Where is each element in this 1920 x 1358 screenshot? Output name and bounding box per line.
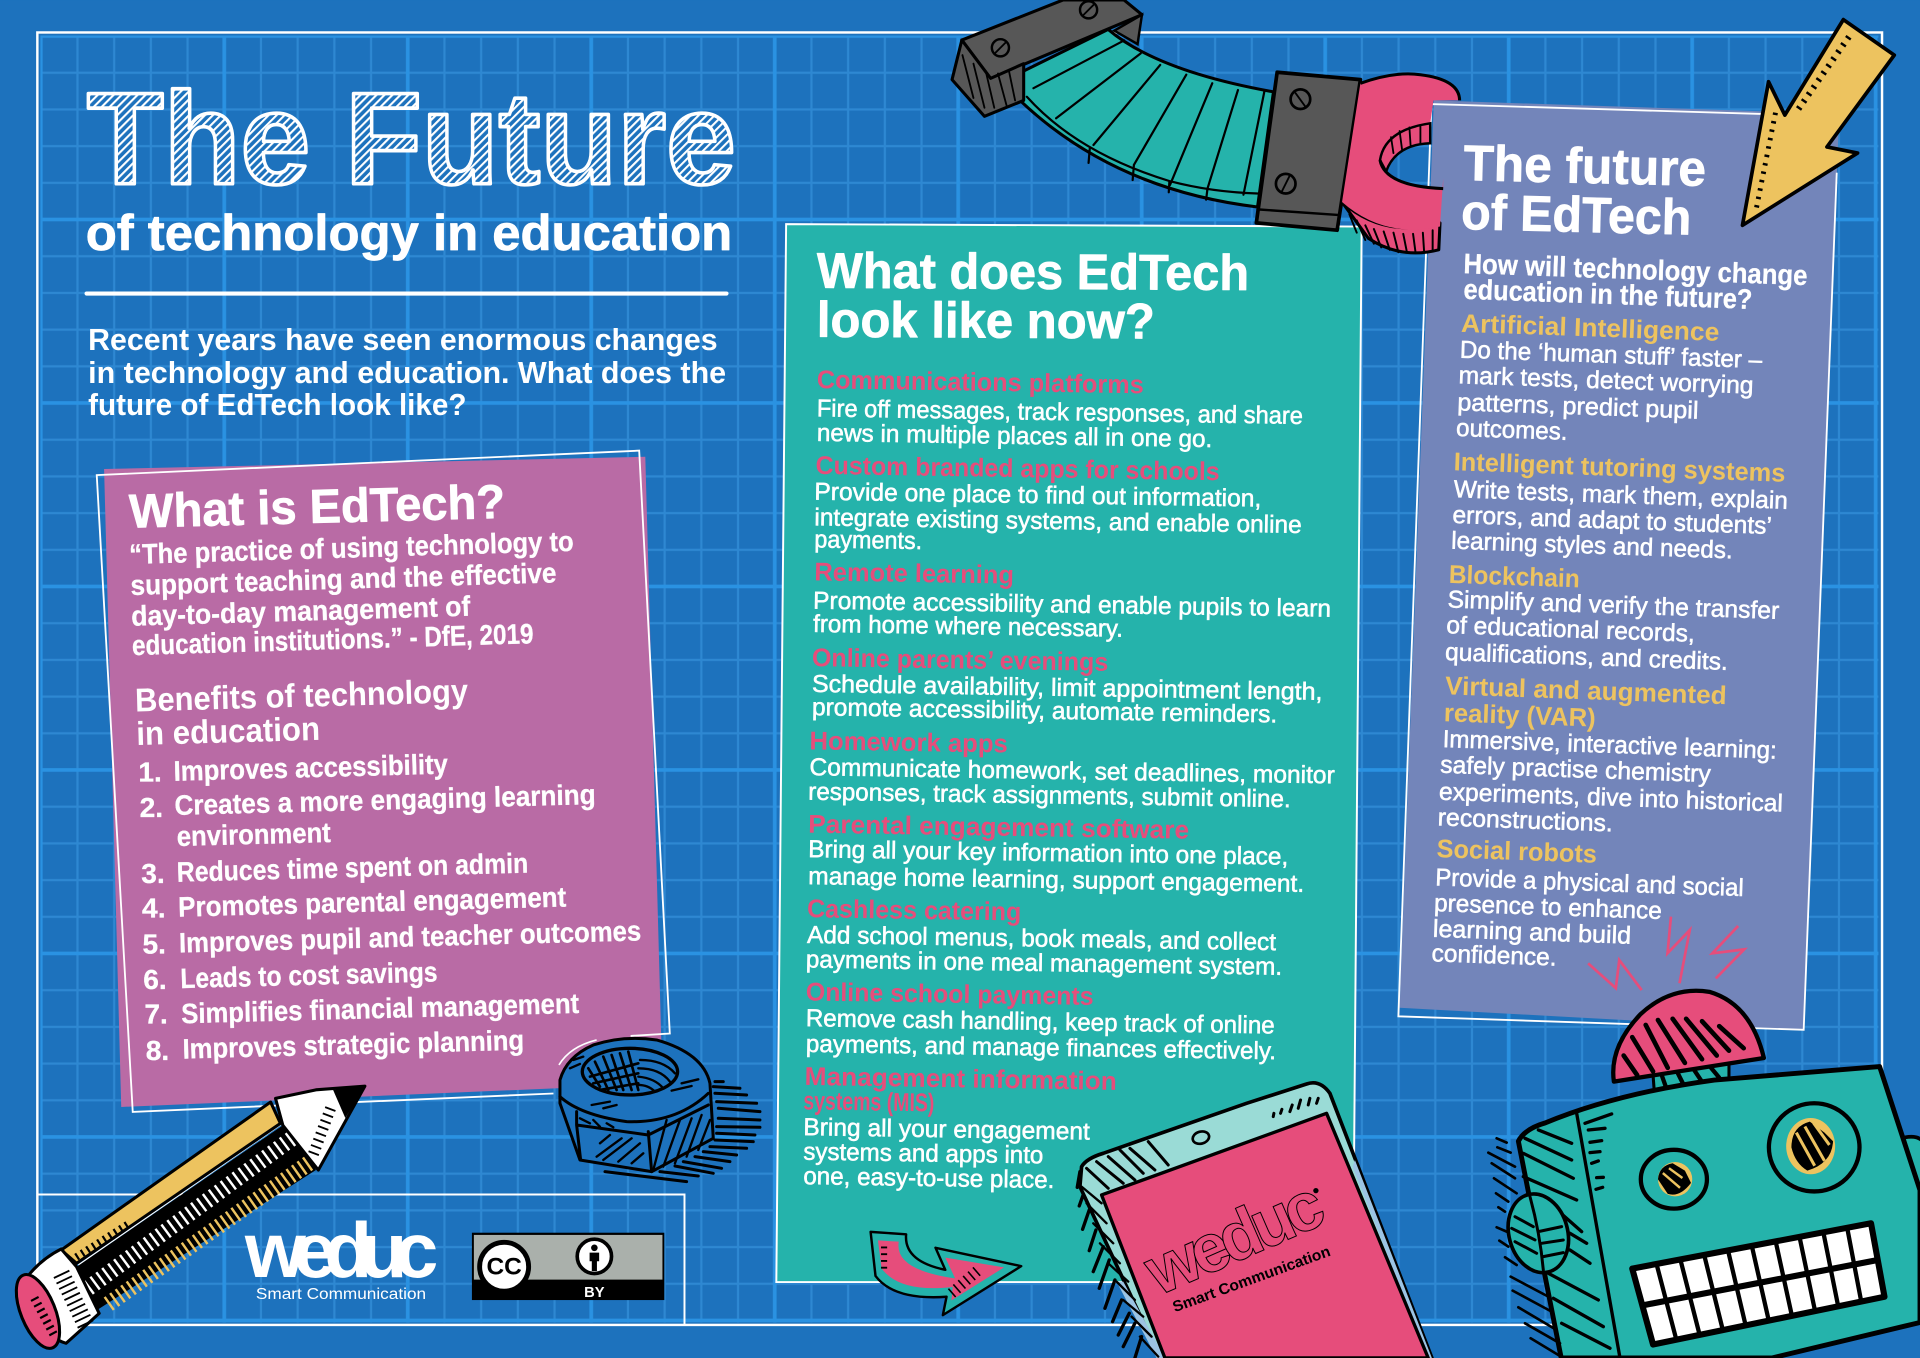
benefits list: 2. <box>140 792 163 823</box>
panel: What does EdTech look like now? <box>776 224 1362 1282</box>
benefits list: Creates a more engaging learning <box>174 779 596 821</box>
weduc wordmark: weduc <box>244 1206 438 1294</box>
benefits list: 5. <box>143 928 166 959</box>
entries: current EdTech: Online parents’ evenings <box>812 644 1108 677</box>
entries: future EdTech: reality (VAR) <box>1443 699 1596 733</box>
robot right ear <box>1899 1137 1920 1206</box>
benefits list: Improves accessibility <box>173 749 449 787</box>
robot side stripes and ear <box>1488 1113 1620 1358</box>
heading: What does EdTech <box>817 243 1249 301</box>
entries: future EdTech: Simplify and verify the transfer <box>1447 586 1780 625</box>
DfE quote: education institutions.” - DfE, 2019 <box>132 618 534 661</box>
entries: future EdTech: Intelligent tutoring systems <box>1453 448 1786 488</box>
benefits list: 8. <box>146 1035 169 1066</box>
entries: current EdTech: systems (MIS) <box>803 1087 935 1117</box>
DfE quote <box>129 526 574 661</box>
subtitle: of technology in education <box>86 205 732 261</box>
entries: current EdTech: Management information <box>804 1063 1117 1096</box>
benefits heading: Benefits of technology <box>135 673 469 719</box>
DfE quote: support teaching and the effective <box>130 557 557 601</box>
phone logo tagline: Smart Communication <box>1170 1243 1333 1316</box>
benefits heading: in education <box>136 711 320 753</box>
intro text: Recent years have seen enormous changes <box>88 323 718 357</box>
entries: current EdTech: Online school payments <box>806 978 1094 1011</box>
entries: current EdTech: payments in one meal management system. <box>806 946 1282 981</box>
heading <box>817 243 1249 350</box>
robot head <box>1518 1067 1920 1358</box>
entries: current EdTech: Cashless catering <box>807 895 1022 927</box>
phone logo wordmark: weduc <box>1133 1166 1335 1310</box>
entries: future EdTech: Blockchain <box>1448 561 1580 593</box>
question: education in the future? <box>1463 274 1753 315</box>
entries: future EdTech: Artificial Intelligence <box>1461 310 1720 347</box>
intro text: future of EdTech look like? <box>88 388 467 422</box>
title <box>84 65 736 422</box>
heading: The future <box>1463 135 1707 197</box>
benefits list: Improves pupil and teacher outcomes <box>179 915 642 959</box>
icon: flexible clamp <box>952 0 1360 230</box>
entries: future EdTech: of educational records, <box>1446 612 1695 648</box>
entries: future EdTech: safely practise chemistry <box>1440 752 1712 788</box>
robot right eye <box>1769 1103 1860 1191</box>
entries: current EdTech: Schedule availability, limit appointment length, <box>812 671 1323 706</box>
entries: future EdTech: confidence. <box>1431 940 1557 972</box>
badge: creative commons: BY <box>584 1285 605 1301</box>
DfE quote: “The practice of using technology to <box>129 526 574 570</box>
DfE quote: day-to-day management of <box>131 591 471 632</box>
icon: yellow arrow <box>1742 20 1894 225</box>
icon: magnet <box>1342 74 1460 253</box>
panel: What is EdTech? <box>97 451 670 1112</box>
benefits list <box>138 749 642 1066</box>
entries: future EdTech: Write tests, mark them, explain <box>1453 476 1788 515</box>
entries: current EdTech: payments. <box>814 526 922 555</box>
entries: future EdTech: presence to enhance <box>1434 890 1662 925</box>
heading <box>1461 135 1707 246</box>
entries: current EdTech: responses, track assignments, submit online. <box>808 779 1291 813</box>
entries: future EdTech: Provide a physical and social <box>1435 864 1744 902</box>
benefits list: 4. <box>142 892 166 923</box>
benefits list: Improves strategic planning <box>182 1025 524 1065</box>
benefits list: 7. <box>144 999 168 1030</box>
icon: smartphone <box>1077 1083 1432 1358</box>
entries: current EdTech: Provide one place to find out information, <box>814 479 1261 513</box>
entries: current EdTech: Homework apps <box>809 727 1008 759</box>
divider <box>84 291 729 296</box>
entries: future EdTech: Immersive, interactive learning: <box>1442 726 1777 765</box>
entries: current EdTech: Fire off messages, track responses, and share <box>817 395 1303 430</box>
entries: current EdTech <box>803 366 1335 1194</box>
robot button <box>1613 991 1764 1082</box>
entries: current EdTech: integrate existing systems, and enable online <box>814 504 1302 539</box>
benefits list: Promotes parental engagement <box>178 882 567 923</box>
entries: future EdTech: Virtual and augmented <box>1445 672 1727 710</box>
entries: current EdTech: news in multiple places all in one go. <box>817 420 1213 453</box>
robot signal bolts <box>1588 917 1744 990</box>
entries: current EdTech: Parental engagement software <box>808 811 1189 845</box>
entries: future EdTech: experiments, dive into historical <box>1439 779 1783 818</box>
question <box>1463 248 1808 315</box>
entries: current EdTech: Communicate homework, set deadlines, monitor <box>809 754 1335 789</box>
logo tagline: Smart Communication <box>256 1286 426 1303</box>
question: How will technology change <box>1463 248 1808 291</box>
entries: current EdTech: Custom branded apps for schools <box>815 452 1220 486</box>
benefits list: Reduces time spent on admin <box>176 848 529 888</box>
entries: future EdTech: errors, and adapt to students’ <box>1452 502 1772 540</box>
entries: future EdTech: patterns, predict pupil <box>1457 389 1699 425</box>
intro text <box>88 323 726 422</box>
entries: future EdTech: learning and build <box>1432 916 1632 950</box>
entries: current EdTech: one, easy-to-use place. <box>803 1163 1055 1194</box>
benefits list: environment <box>176 817 332 852</box>
entries: future EdTech: Social robots <box>1436 835 1597 869</box>
entries: future EdTech: outcomes. <box>1456 415 1568 446</box>
badge: creative commons <box>472 1233 664 1301</box>
benefits list: 6. <box>143 964 167 995</box>
heading: look like now? <box>817 292 1155 350</box>
entries: future EdTech: mark tests, detect worrying <box>1458 362 1754 400</box>
entries: future EdTech: Do the ‘human stuff’ faster – <box>1459 337 1763 374</box>
entries: current EdTech: Add school menus, book meals, and collect <box>807 922 1276 956</box>
entries: future EdTech: reconstructions. <box>1437 804 1613 837</box>
entries: future EdTech <box>1431 310 1788 972</box>
robot left eye <box>1641 1150 1707 1209</box>
title: The Future: The Future <box>87 65 736 212</box>
benefits list: 3. <box>141 858 165 889</box>
entries: current EdTech: Remove cash handling, keep track of online <box>806 1005 1275 1040</box>
benefits heading <box>135 673 469 753</box>
entries: future EdTech: learning styles and needs. <box>1451 528 1733 564</box>
logo: weduc <box>244 1206 438 1303</box>
robot stem <box>1653 1063 1729 1108</box>
entries: current EdTech: Remote learning <box>814 558 1014 590</box>
entries: current EdTech: Communications platforms <box>817 366 1144 399</box>
entries: future EdTech: qualifications, and credits. <box>1445 639 1728 676</box>
panel: The future of EdTech <box>1398 100 1839 1030</box>
entries: current EdTech: Promote accessibility and enable pupils to learn <box>813 588 1331 623</box>
benefits list: Simplifies financial management <box>181 988 580 1029</box>
icon: robot <box>1488 917 1920 1358</box>
entries: current EdTech: from home where necessary. <box>813 611 1123 643</box>
entries: current EdTech: promote accessibility, automate reminders. <box>812 694 1277 728</box>
intro text: in technology and education. What does the <box>88 356 726 390</box>
icon: pencil <box>7 1086 365 1354</box>
robot mouth <box>1632 1223 1884 1345</box>
icon: hex nut <box>559 1038 760 1182</box>
heading: What is EdTech?: What is EdTech? <box>128 476 506 539</box>
heading: of EdTech <box>1461 184 1692 246</box>
entries: current EdTech: Bring all your key information into one place, <box>808 836 1288 871</box>
benefits list: Leads to cost savings <box>180 956 438 994</box>
badge: creative commons: CC <box>486 1254 522 1281</box>
entries: current EdTech: manage home learning, support engagement. <box>808 863 1304 898</box>
benefits list: 1. <box>138 757 162 788</box>
icon: curved arrow <box>871 1232 1021 1315</box>
entries: current EdTech: payments, and manage finances effectively. <box>806 1031 1276 1065</box>
entries: current EdTech: Bring all your engagement <box>803 1114 1090 1146</box>
entries: current EdTech: systems and apps into <box>803 1139 1044 1169</box>
